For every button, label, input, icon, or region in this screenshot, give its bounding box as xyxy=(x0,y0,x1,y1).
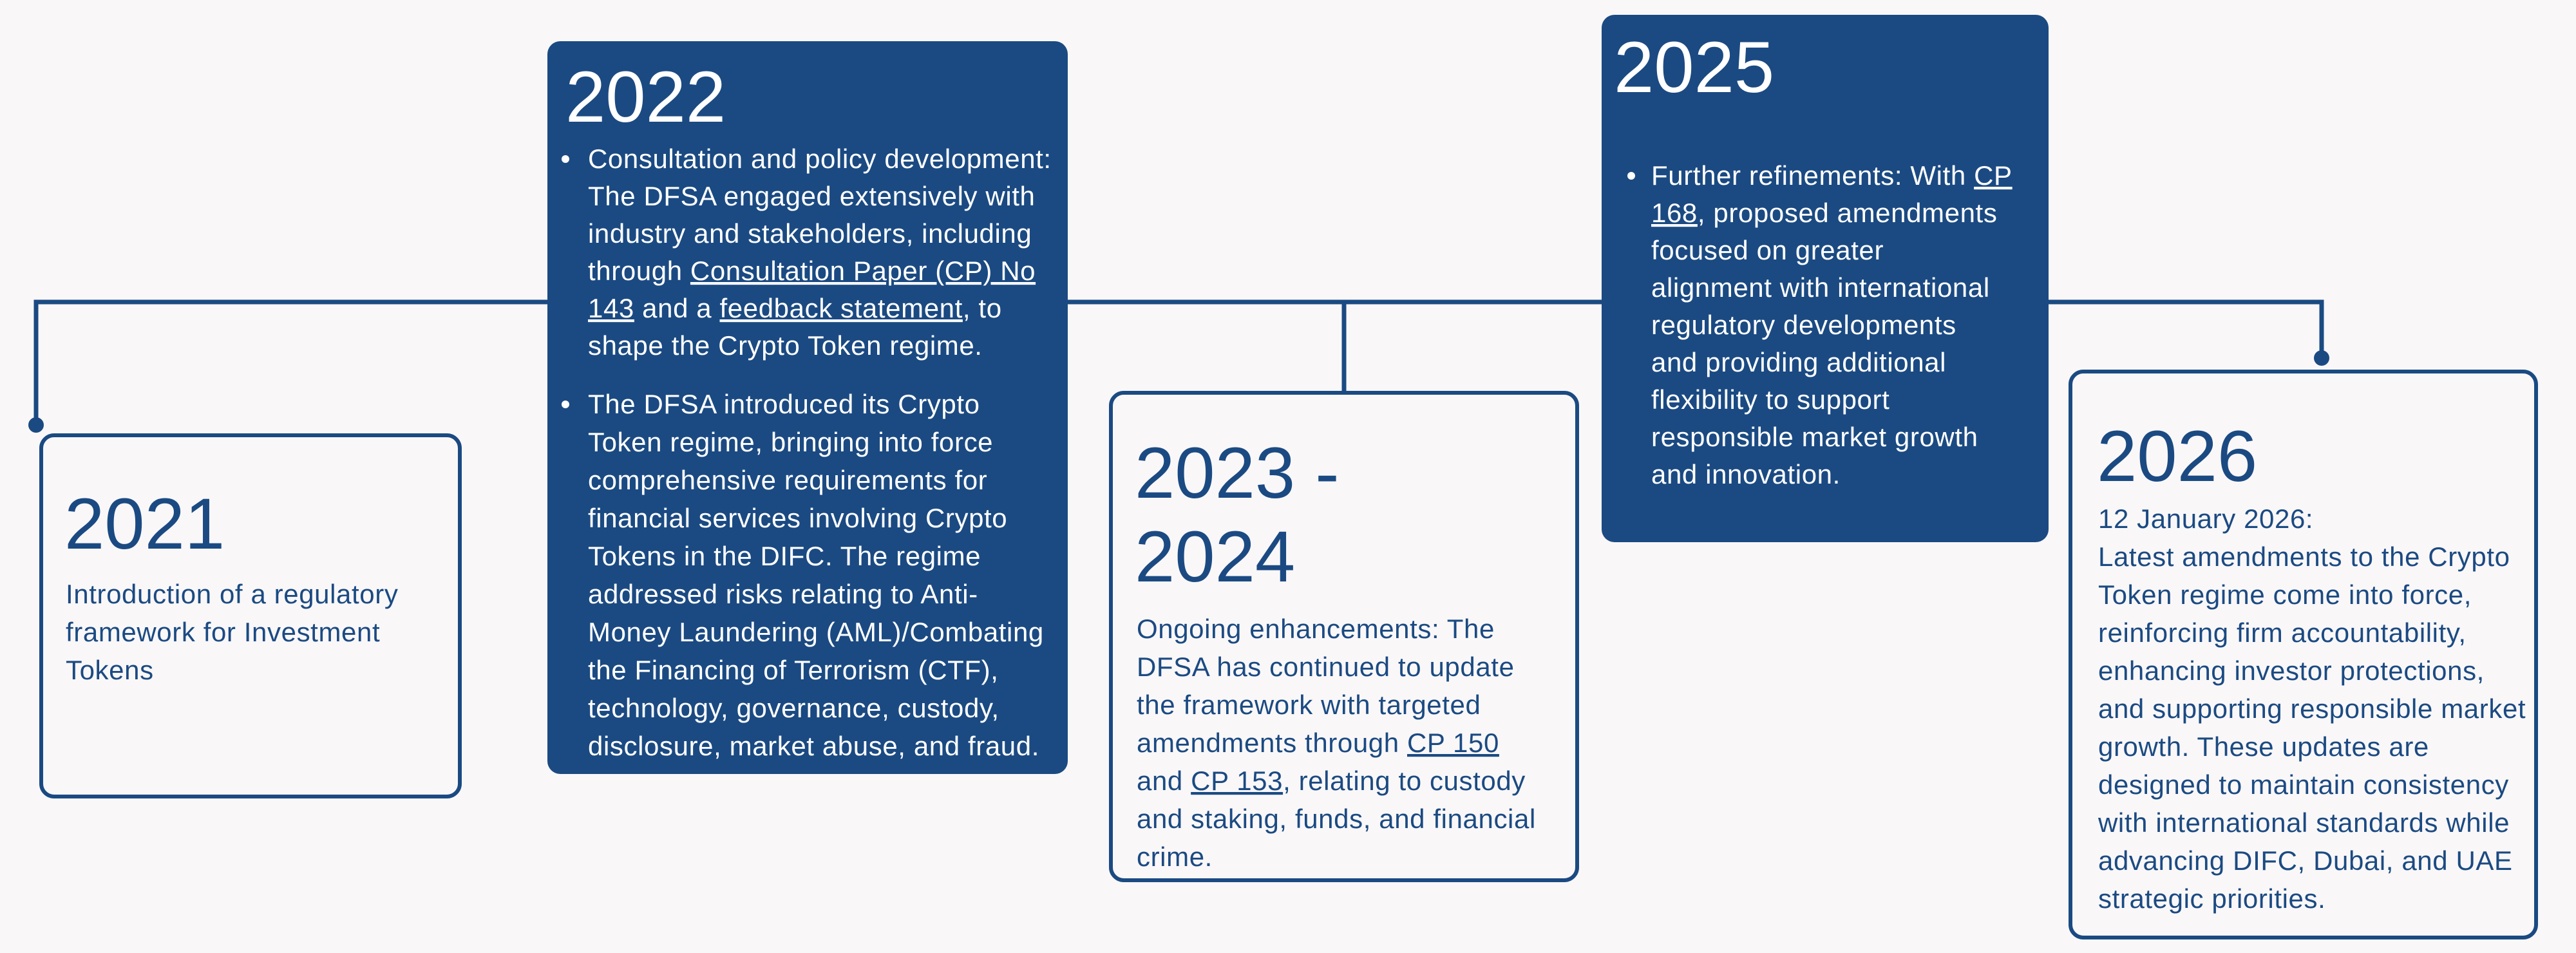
panel: 2026: reinforcing firm accountability, xyxy=(2098,618,2467,648)
panel: 2021: Tokens xyxy=(66,655,154,685)
panel: 2023-2024: the framework with targeted xyxy=(1137,690,1481,720)
panel: 2026: advancing DIFC, Dubai, and UAE xyxy=(2098,845,2513,876)
panel: 2021: 2021 xyxy=(64,484,225,564)
panel: 2022: Token regime, bringing into force xyxy=(588,427,993,457)
panel: 2023-2024: Ongoing enhancements: The xyxy=(1137,614,1495,644)
panel: 2025: alignment with international xyxy=(1651,272,1990,303)
panel: 2025: responsible market growth xyxy=(1651,422,1978,452)
panel: 2025: and innovation. xyxy=(1651,459,1841,489)
panel: 2026: with international standards while xyxy=(2098,807,2510,838)
panel: 2026: Latest amendments to the Crypto xyxy=(2098,542,2510,572)
panel: 2022: Tokens in the DIFC. The regime xyxy=(588,541,981,571)
panel: 2026: 12 January 2026: xyxy=(2098,504,2313,534)
panel: 2025: 2025 xyxy=(1614,27,1774,108)
panel: 2026: growth. These updates are xyxy=(2098,731,2429,762)
panel: 2022: the Financing of Terrorism (CTF), xyxy=(588,655,999,685)
dot: 2026 connector xyxy=(2314,350,2329,366)
panel: 2022: technology, governance, custody, xyxy=(588,693,999,723)
panel: 2026: 2026 xyxy=(2097,416,2257,496)
panel: 2022: industry and stakeholders, including xyxy=(588,218,1032,249)
panel: 2022: The DFSA engaged extensively with xyxy=(588,181,1036,211)
timeline line xyxy=(36,302,2322,425)
panel: 2025: flexibility to support xyxy=(1651,384,1889,415)
panel: 2022: financial services involving Crypto xyxy=(588,503,1007,533)
panel: 2023-2024: 2024 xyxy=(1135,516,1295,597)
panel: 2025: and providing additional xyxy=(1651,347,1946,377)
panel: 2023-2024: DFSA has continued to update xyxy=(1137,652,1515,682)
panel: 2023-2024: and staking, funds, and financial xyxy=(1137,804,1536,834)
panel: 2023-2024: 2023 - xyxy=(1135,433,1340,513)
panel: 2022 xyxy=(547,41,1068,774)
panel: 2023-2024: amendments through CP 150 xyxy=(1137,728,1499,758)
panel: 2022: through Consultation Paper (CP) No xyxy=(588,256,1036,286)
panel: 2025: Further refinements: With CP xyxy=(1651,160,2012,191)
panel: 2025: regulatory developments xyxy=(1651,310,1956,340)
dot: 2021 connector xyxy=(28,417,44,433)
panel: 2026: and supporting responsible market xyxy=(2098,694,2526,724)
panel: 2022: comprehensive requirements for xyxy=(588,465,987,495)
panel: 2022: The DFSA introduced its Crypto xyxy=(588,389,980,419)
panel: 2026: Token regime come into force, xyxy=(2098,580,2472,610)
panel: 2022: addressed risks relating to Anti- xyxy=(588,579,978,609)
panel: 2021: Introduction of a regulatory xyxy=(66,579,398,609)
panel: 2022: Consultation and policy development: xyxy=(588,144,1052,174)
panel: 2022: Money Laundering (AML)/Combating xyxy=(588,617,1044,647)
panel: 2023-2024: crime. xyxy=(1137,842,1213,872)
panel: 2026 xyxy=(2070,372,2536,938)
panel: 2022: disclosure, market abuse, and fraud. xyxy=(588,731,1039,761)
panel: 2025 xyxy=(1602,15,2049,542)
panel: 2021: framework for Investment xyxy=(66,617,380,647)
panel: 2026: strategic priorities. xyxy=(2098,883,2325,914)
panel: 2022: 2022 xyxy=(565,57,726,137)
panel: 2021 xyxy=(41,435,460,797)
panel: 2022: 143 and a feedback statement, to xyxy=(588,293,1002,323)
panel: 2022: shape the Crypto Token regime. xyxy=(588,330,983,361)
panel: 2025: focused on greater xyxy=(1651,235,1884,265)
panel: 2023-2024 xyxy=(1111,393,1577,880)
panel: 2025: 168, proposed amendments xyxy=(1651,198,1997,228)
panel: 2026: designed to maintain consistency xyxy=(2098,769,2509,800)
panel: 2023-2024: and CP 153, relating to custody xyxy=(1137,766,1526,796)
panel: 2026: enhancing investor protections, xyxy=(2098,656,2485,686)
